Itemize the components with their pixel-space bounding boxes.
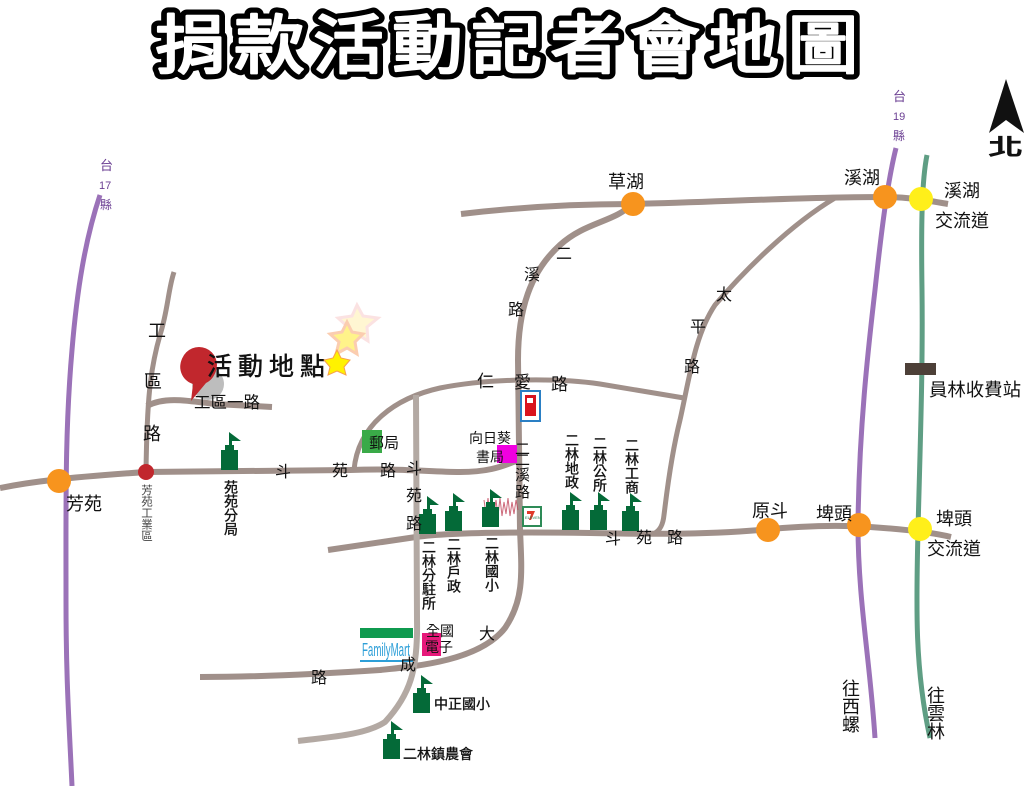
label: Pitou interchange 2: 交流道 bbox=[927, 539, 981, 559]
building: Yuanyuan branch bbox=[221, 432, 241, 470]
stars bbox=[324, 305, 378, 375]
north arrow: 北 bbox=[988, 135, 1023, 160]
FamilyMart logo bbox=[360, 628, 413, 662]
label: Erxi road upper: 路 bbox=[508, 301, 524, 319]
highway 19 label: 台 bbox=[893, 89, 906, 104]
label: Gongqu road: 區 bbox=[144, 372, 162, 392]
label: Gongqu 1st road: 工區一路 bbox=[194, 393, 260, 412]
road: Erxi bbox=[200, 204, 632, 677]
road: Renai bbox=[354, 380, 684, 470]
label: Xihu interchange 2: 交流道 bbox=[935, 211, 989, 231]
road: Douyuan east bbox=[328, 526, 951, 550]
label: Pitou interchange: 埤頭 bbox=[936, 509, 972, 529]
post office bbox=[362, 430, 399, 453]
label: to Yunlin: 往雲林 bbox=[925, 686, 945, 740]
label: Douyuan road west bbox=[275, 461, 422, 533]
label: Xihu: 溪湖 bbox=[844, 168, 880, 188]
toll station: 員林收費站 bbox=[929, 379, 1021, 400]
scribble bbox=[484, 498, 518, 516]
building: Zhongzheng school bbox=[413, 675, 433, 713]
label: Gongqu road: 工 bbox=[148, 321, 166, 341]
label: Xihu interchange: 溪湖 bbox=[944, 181, 980, 201]
building: land office bbox=[562, 492, 582, 530]
label: Renai road: 路 bbox=[551, 375, 568, 394]
post office: 郵局 bbox=[369, 435, 399, 452]
7-Eleven icon: ELEVEN bbox=[525, 515, 541, 520]
label: elementary: 二林國小 bbox=[484, 536, 500, 593]
label: Douyuan road west: 路 bbox=[380, 462, 396, 480]
FamilyMart logo: FamilyMart bbox=[362, 640, 410, 660]
label: Dacheng road bbox=[311, 625, 495, 687]
label: Erxi road upper: 二 bbox=[556, 246, 572, 263]
label: Douyuan road west: 苑 bbox=[406, 487, 422, 505]
label: to Xiluo: 往西螺 bbox=[840, 679, 860, 734]
label: Erxi road upper bbox=[508, 246, 572, 319]
highway 17 label: 17 bbox=[99, 180, 111, 192]
bookstore: 書局 bbox=[476, 449, 504, 465]
highway 17 label bbox=[99, 158, 113, 212]
junction nodes bbox=[47, 185, 933, 542]
building: township office bbox=[590, 492, 610, 530]
road: Taiping bbox=[655, 198, 835, 533]
building: police bbox=[419, 496, 439, 534]
road: Gongqu bbox=[146, 272, 174, 472]
label: Yuanyuan branch: 苑苑分局 bbox=[223, 480, 239, 536]
label: farmers association: 二林鎮農會 bbox=[403, 746, 473, 762]
bookstore: 向日葵 bbox=[469, 430, 511, 446]
label: Caohu: 草湖 bbox=[608, 172, 644, 192]
label: Taiping road: 平 bbox=[690, 319, 706, 336]
label: Erxi road lower bbox=[515, 441, 530, 501]
label: Erxi road lower: 二 bbox=[515, 441, 530, 458]
toll station bbox=[905, 363, 1021, 400]
label: Douyuan road east: 路 bbox=[667, 529, 683, 547]
highway 17 label: 台 bbox=[100, 158, 113, 173]
label: Taiping road bbox=[684, 286, 732, 376]
7-Eleven icon bbox=[523, 507, 541, 526]
highway 19 label bbox=[893, 89, 906, 143]
label: vocational: 二林工商 bbox=[624, 438, 640, 494]
road: Gongqu 1st bbox=[147, 400, 272, 407]
label: Douyuan road east: 苑 bbox=[636, 529, 652, 547]
label: Pitou: 埤頭 bbox=[816, 504, 852, 524]
label: Douyuan road west: 斗 bbox=[406, 461, 422, 478]
electronics store bbox=[422, 623, 454, 656]
highway 17 label: 縣 bbox=[100, 197, 112, 212]
label: Erxi road upper: 溪 bbox=[524, 266, 540, 284]
event marker: 活動地點 bbox=[207, 353, 325, 381]
electronics store: 電子 bbox=[425, 639, 453, 655]
label: Erxi road lower: 二 bbox=[515, 452, 530, 469]
label: Douyuan road west: 路 bbox=[406, 515, 422, 533]
road: Caohu bbox=[461, 197, 948, 214]
bookstore bbox=[469, 430, 517, 465]
label: Douyuan road east bbox=[605, 529, 683, 548]
flag buildings bbox=[221, 432, 642, 759]
label: Zhongzheng school: 中正國小 bbox=[434, 696, 490, 712]
label: Dacheng road: 路 bbox=[311, 669, 327, 687]
label: Douyuan road east: 斗 bbox=[605, 531, 621, 548]
event marker bbox=[180, 347, 325, 401]
label: Erxi road lower: 溪 bbox=[515, 467, 530, 484]
building: vocational school bbox=[622, 493, 642, 531]
label: land office: 二林地政 bbox=[564, 433, 580, 489]
label: police: 二林分駐所 bbox=[421, 540, 437, 610]
label: Fangyuan: 芳苑 bbox=[66, 494, 102, 514]
label: Gongqu road bbox=[143, 321, 166, 444]
road: highway 19 bbox=[858, 148, 896, 738]
label: Fangyuan industrial: 芳苑工業區 bbox=[140, 484, 153, 542]
building: farmers association bbox=[383, 721, 403, 759]
road: freeway bbox=[917, 155, 930, 738]
gas station icon bbox=[521, 391, 540, 421]
label: Gongqu road: 路 bbox=[143, 424, 161, 444]
label: Yuandou: 原斗 bbox=[752, 501, 788, 521]
highway 19 label: 19 bbox=[893, 111, 905, 123]
label: Taiping road: 太 bbox=[716, 286, 732, 304]
label: Dacheng road: 大 bbox=[479, 625, 495, 643]
label: Dacheng road: 成 bbox=[400, 656, 416, 674]
road network bbox=[0, 148, 951, 786]
label: household: 二林戶政 bbox=[446, 537, 462, 593]
building: elementary bbox=[482, 489, 502, 527]
building: household office bbox=[445, 493, 465, 531]
north arrow bbox=[988, 79, 1024, 160]
road: highway 17 bbox=[66, 195, 100, 786]
label: Renai road bbox=[477, 372, 568, 394]
road: Yuancheng bbox=[298, 395, 417, 741]
vertical building labels bbox=[223, 433, 640, 610]
place labels bbox=[66, 168, 989, 740]
label: Douyuan road west: 斗 bbox=[275, 464, 291, 481]
label: Renai road: 仁 bbox=[477, 372, 494, 391]
electronics store: 全國 bbox=[426, 623, 454, 639]
road: Douyuan west bbox=[0, 460, 518, 488]
label: Renai road: 愛 bbox=[514, 373, 531, 392]
label: township: 二林公所 bbox=[592, 436, 608, 492]
label: Douyuan road west: 苑 bbox=[332, 462, 348, 480]
label: Erxi road lower: 路 bbox=[515, 484, 530, 501]
label: Taiping road: 路 bbox=[684, 358, 700, 376]
highway 19 label: 縣 bbox=[893, 128, 905, 143]
